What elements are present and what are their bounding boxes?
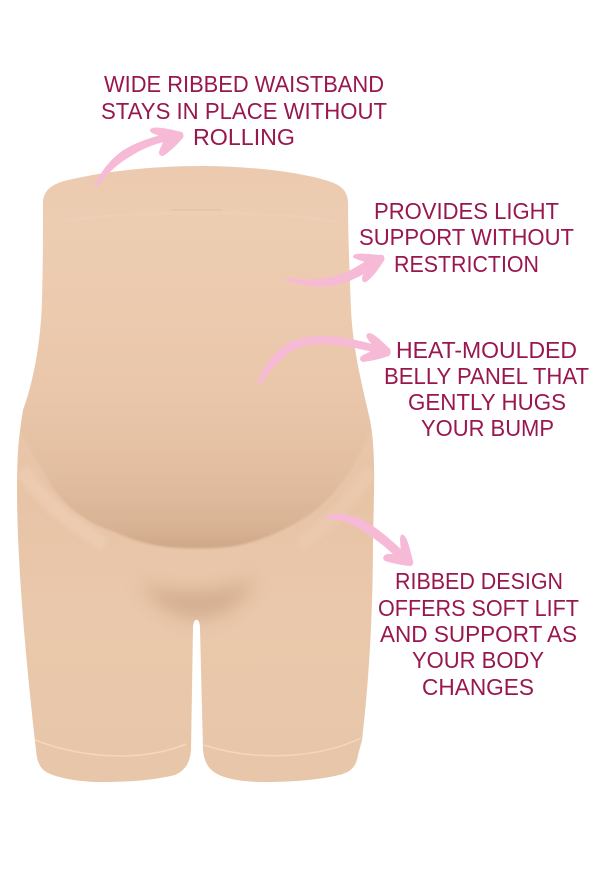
right leg hem <box>204 738 361 756</box>
arrow: ribbed design <box>325 514 413 566</box>
arrow: belly panel <box>258 333 391 384</box>
waistband tuck <box>170 210 222 211</box>
text: ribbed design <box>378 568 579 700</box>
text: ribbed design: CHANGES <box>422 674 534 700</box>
ribbed support band <box>22 472 102 544</box>
text: light support <box>359 198 574 277</box>
text: ribbed design: YOUR BODY <box>412 647 544 673</box>
text: waistband: WIDE RIBBED WAISTBAND <box>104 71 384 97</box>
garment: maternity shorts <box>17 166 374 782</box>
text: belly panel: YOUR BUMP <box>421 415 554 441</box>
belly panel <box>48 473 343 549</box>
text: ribbed design: AND SUPPORT AS <box>380 621 577 647</box>
waistband seam <box>60 213 335 222</box>
text: light support: SUPPORT WITHOUT <box>359 224 574 250</box>
arrow: light support <box>286 254 384 287</box>
crotch shadow <box>140 578 255 618</box>
text: belly panel: HEAT-MOULDED <box>396 337 577 363</box>
text: waistband: ROLLING <box>193 124 295 150</box>
left leg hem <box>33 739 186 756</box>
text: waistband <box>101 71 387 150</box>
arrow: waistband <box>95 128 184 186</box>
text: light support: PROVIDES LIGHT <box>374 198 559 224</box>
text: ribbed design: RIBBED DESIGN <box>395 568 563 594</box>
text: belly panel: BELLY PANEL THAT <box>384 363 589 389</box>
text: belly panel: GENTLY HUGS <box>408 389 566 415</box>
text: belly panel <box>384 337 589 441</box>
text: ribbed design: OFFERS SOFT LIFT <box>378 595 579 621</box>
text: waistband: STAYS IN PLACE WITHOUT <box>101 98 387 124</box>
text: light support: RESTRICTION <box>394 251 539 277</box>
